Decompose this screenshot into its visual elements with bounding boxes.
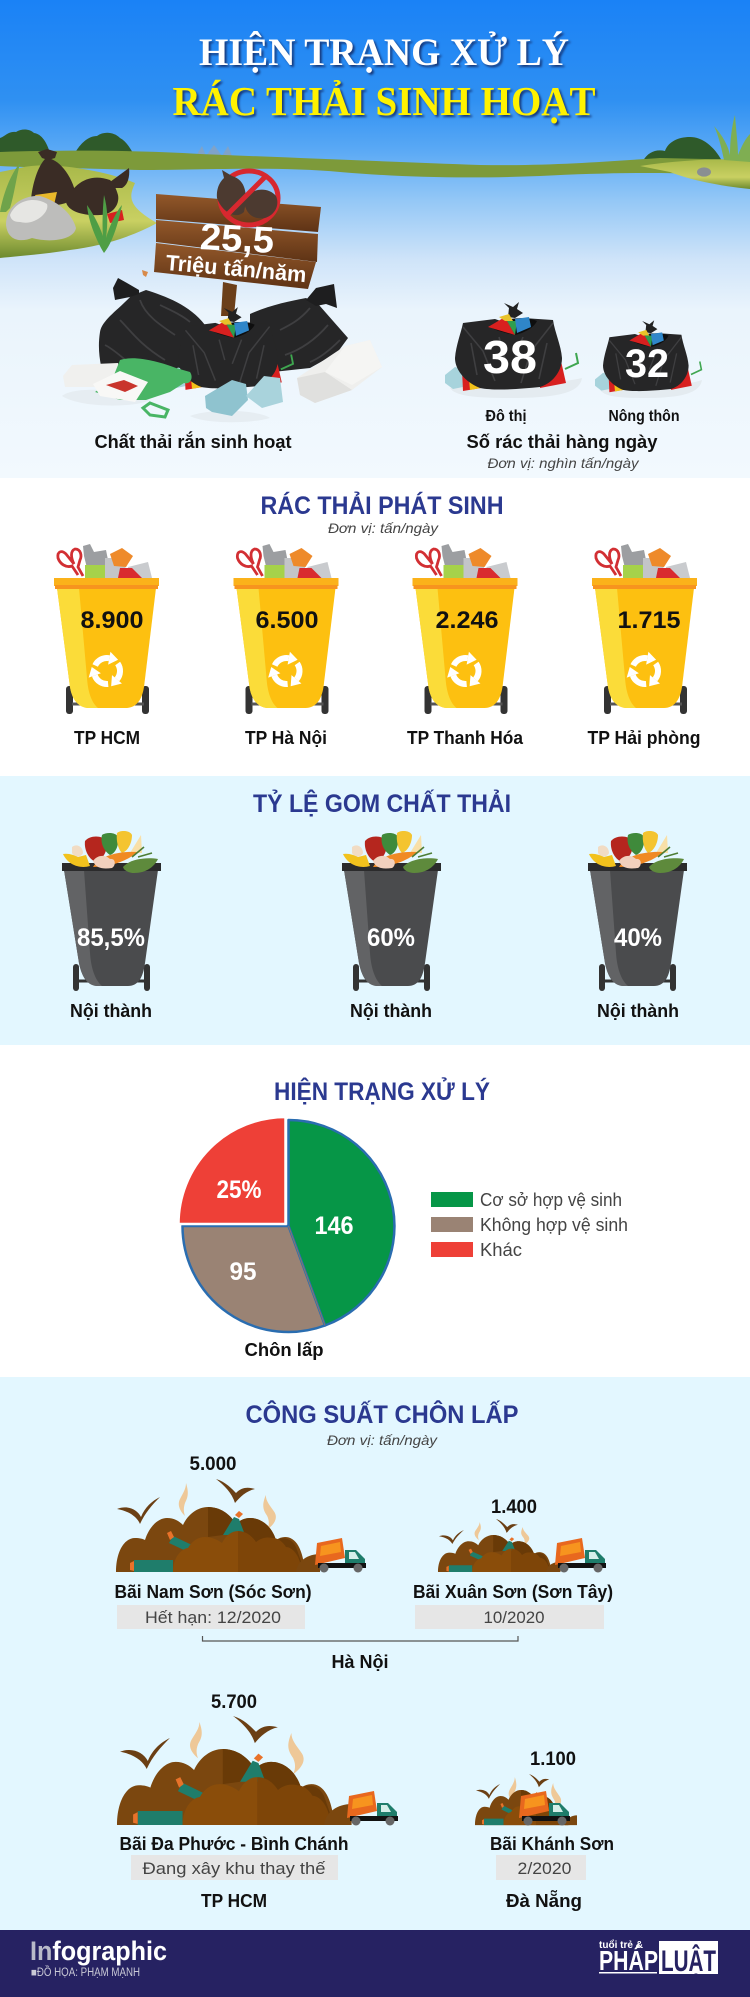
dark bin 40%: Nội thành <box>597 1001 679 1021</box>
icon: rural trash bag 32: 32 <box>625 342 669 386</box>
icon: urban trash bag 38: 38 <box>483 331 537 383</box>
landfill: Bãi Đa Phước: Đang xây khu thay thế <box>142 1859 326 1878</box>
dark bin 60%: Nội thành <box>350 1001 432 1021</box>
landfill: Bãi Nam Sơn: Hết hạn: 12/2020 <box>145 1608 281 1627</box>
landfill: Bãi Nam Sơn <box>114 1454 366 1629</box>
dark bin 85,5% <box>62 831 161 1021</box>
label: Hà Nội: Hà Nội <box>332 1652 388 1672</box>
label: đô thị: Đô thị <box>486 408 526 425</box>
sign: 25,5 triệu tấn/năm <box>154 170 321 316</box>
dark bin 85,5%: 85,5% <box>77 924 145 952</box>
dark bin 40% <box>588 831 687 1021</box>
dark bin 60%: 60% <box>367 924 415 952</box>
yellow bin: TP HCM: 8.900 <box>80 607 144 634</box>
icon: urban trash bag 38 <box>445 302 582 398</box>
yellow bin: TP Thanh Hóa: 2.246 <box>436 607 498 634</box>
yellow bin: TP Thanh Hóa <box>407 544 524 748</box>
landfill: Bãi Khánh Sơn: 1.100 <box>530 1749 576 1770</box>
yellow bin: TP Hải phòng <box>588 544 700 748</box>
dark bin 60% <box>342 831 441 1021</box>
landfill: Bãi Đa Phước: Bãi Đa Phước - Bình Chánh <box>120 1834 348 1854</box>
panel: footer <box>0 1930 750 1997</box>
yellow bin: TP HCM: TP HCM <box>74 728 140 748</box>
pie chart: 25% <box>216 1176 262 1204</box>
landfill: Bãi Xuân Sơn: 1.400 <box>491 1497 537 1518</box>
label: nông thôn: Nông thôn <box>608 408 680 425</box>
landfill: Bãi Đa Phước <box>117 1692 398 1911</box>
heading: TỶ LỆ GOM CHẤT THẢI <box>253 788 511 818</box>
panel: công suất chôn lấp <box>0 1377 750 1930</box>
yellow bin: TP Hà Nội: TP Hà Nội <box>245 728 327 748</box>
unit note: Đơn vị: tấn/ngày <box>327 1432 438 1448</box>
landscape: trees and river bank <box>0 115 750 189</box>
icon: rural trash bag 32 <box>595 320 702 398</box>
label: số rác thải hàng ngày: Số rác thải hàng ngày <box>466 432 658 452</box>
heading: RÁC THẢI PHÁT SINH <box>260 490 504 520</box>
landfill: Bãi Xuân Sơn: Bãi Xuân Sơn (Sơn Tây) <box>413 1582 613 1602</box>
title: RÁC THẢI SINH HOẠT <box>172 78 596 124</box>
yellow bin: TP Hà Nội <box>234 544 338 748</box>
panel: hero sky <box>0 0 750 478</box>
illustration: pile of trash bags <box>62 270 382 422</box>
heading: HIỆN TRẠNG XỬ LÝ <box>274 1076 490 1106</box>
pie chart: 95 <box>230 1258 257 1286</box>
legend: Khác <box>480 1240 522 1260</box>
legend: Không hợp vệ sinh <box>480 1215 628 1235</box>
panel: hiện trạng xử lý <box>0 1045 750 1377</box>
yellow bin: TP Hải phòng: 1.715 <box>618 607 680 634</box>
title: HIỆN TRẠNG XỬ LÝ <box>199 30 569 74</box>
landfill: Bãi Nam Sơn: 5.000 <box>190 1454 236 1475</box>
landfill: Bãi Đa Phước: 5.700 <box>211 1692 257 1713</box>
yellow bin: TP Thanh Hóa: TP Thanh Hóa <box>407 728 524 748</box>
landfill: Bãi Khánh Sơn: 2/2020 <box>518 1859 572 1878</box>
landfill: Bãi Khánh Sơn: Đà Nẵng <box>506 1889 582 1911</box>
unit note: Đơn vị: tấn/ngày <box>328 520 439 536</box>
logo <box>599 1939 718 1978</box>
yellow bin: TP Hà Nội: 6.500 <box>256 607 318 634</box>
landfill: Bãi Xuân Sơn <box>413 1497 613 1629</box>
unit note: Đơn vị: nghìn tấn/ngày <box>488 455 640 471</box>
legend <box>431 1190 628 1260</box>
heading: CÔNG SUẤT CHÔN LẤP <box>246 1399 518 1429</box>
sign unit: Triệu tấn/năm <box>165 250 307 287</box>
pie caption: Chôn lấp <box>244 1340 324 1360</box>
dark bin 40%: 40% <box>614 924 662 952</box>
logo: tuổi trẻ & <box>599 1939 643 1951</box>
left island with dumped bags <box>0 149 157 258</box>
logo: LUẬT <box>661 1944 716 1978</box>
yellow bin: TP Hải phòng: TP Hải phòng <box>588 728 700 748</box>
landfill: Bãi Khánh Sơn: Bãi Khánh Sơn <box>490 1834 614 1854</box>
footer title: Infographic <box>30 1936 167 1966</box>
dark bin 85,5%: Nội thành <box>70 1001 152 1021</box>
landfill: Bãi Nam Sơn: Bãi Nam Sơn (Sóc Sơn) <box>114 1582 312 1602</box>
logo: PHÁP <box>599 1945 658 1976</box>
yellow bin: TP HCM <box>54 544 159 748</box>
landfill: Bãi Khánh Sơn <box>475 1749 614 1911</box>
pie chart <box>178 1117 394 1332</box>
legend: Cơ sở hợp vệ sinh <box>480 1190 622 1210</box>
landfill: Bãi Đa Phước: TP HCM <box>201 1891 267 1911</box>
label: chất thải rắn sinh hoạt: Chất thải rắn sinh hoạt <box>94 431 292 452</box>
sign number: 25,5 <box>199 216 275 261</box>
landfill: Bãi Xuân Sơn: 10/2020 <box>484 1608 544 1627</box>
panel: rác thải phát sinh <box>0 478 750 776</box>
credit: ■ĐỒ HỌA: PHẠM MẠNH <box>31 1966 140 1979</box>
title <box>172 30 596 124</box>
panel: tỷ lệ gom chất thải <box>0 776 750 1045</box>
bracket: Hà Nội <box>202 1636 518 1641</box>
pie chart: 146 <box>314 1212 354 1240</box>
icon: no-dumping symbol <box>217 170 278 225</box>
